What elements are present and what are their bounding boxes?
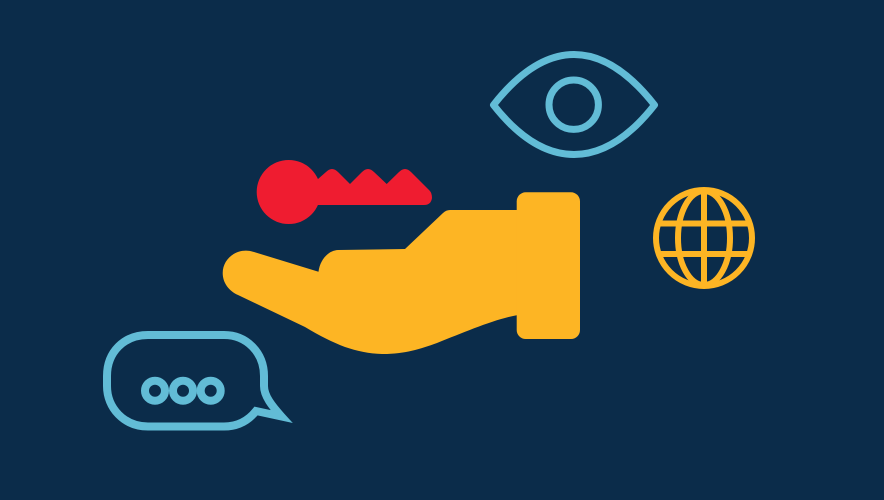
icon: eye: [494, 54, 654, 154]
icon: yellow hand: [223, 192, 580, 354]
icon: red key: [257, 160, 432, 224]
bubble dots: [145, 381, 221, 401]
icon: globe: [656, 190, 752, 286]
icon: speech bubble: [107, 335, 282, 426]
